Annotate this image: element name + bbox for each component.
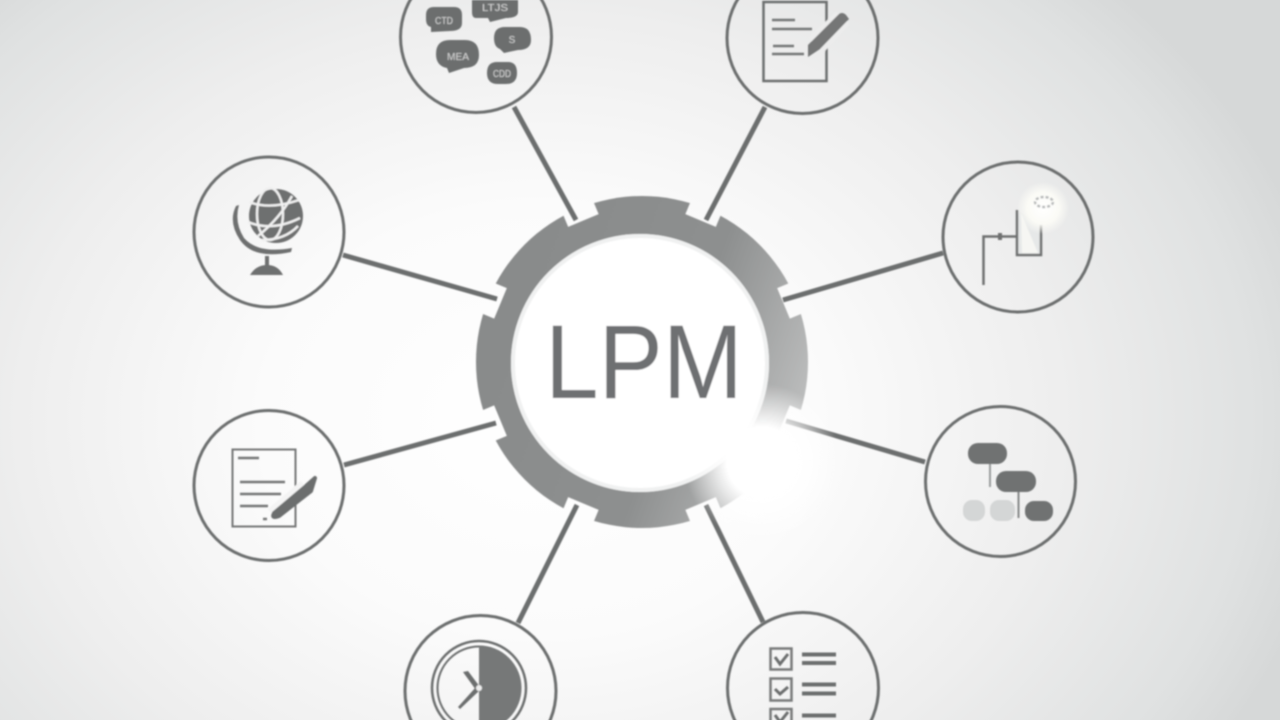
- icon: speech bubbles: S: [509, 35, 516, 46]
- light glow: [684, 384, 840, 540]
- icon: speech bubbles: LTJS: [482, 3, 508, 14]
- icon: speech bubbles: CTD: [435, 16, 453, 27]
- node: globe: [194, 157, 344, 307]
- hub label: LPM: [545, 304, 743, 421]
- inner white disc: [513, 236, 767, 490]
- icon: light bulb: [1017, 182, 1069, 234]
- node: clock: [405, 616, 556, 720]
- icon: speech bubbles: CDD: [493, 69, 511, 80]
- icon: document and pen: [232, 450, 315, 526]
- node: document with pencil: [727, 0, 878, 114]
- node: document with pen: [194, 410, 344, 560]
- node: workflow blocks: [926, 406, 1076, 556]
- icon: checklist: [770, 648, 836, 720]
- icon: half-filled clock: [432, 641, 526, 720]
- icon: speech bubbles: [426, 0, 531, 84]
- icon: document and pencil: [764, 2, 850, 81]
- gear ring: [470, 190, 814, 534]
- node: checklist: [728, 612, 878, 720]
- central gear hub: [470, 190, 840, 540]
- icon: speech bubbles: MEA: [447, 52, 469, 63]
- connector lines: [343, 107, 943, 623]
- node: flow and light bulb: [943, 162, 1093, 312]
- icon: globe on stand: [233, 188, 303, 275]
- icon: workflow pills: [963, 443, 1053, 521]
- node: speech bubbles: [400, 0, 552, 112]
- icon: pipe and document: [984, 182, 1069, 285]
